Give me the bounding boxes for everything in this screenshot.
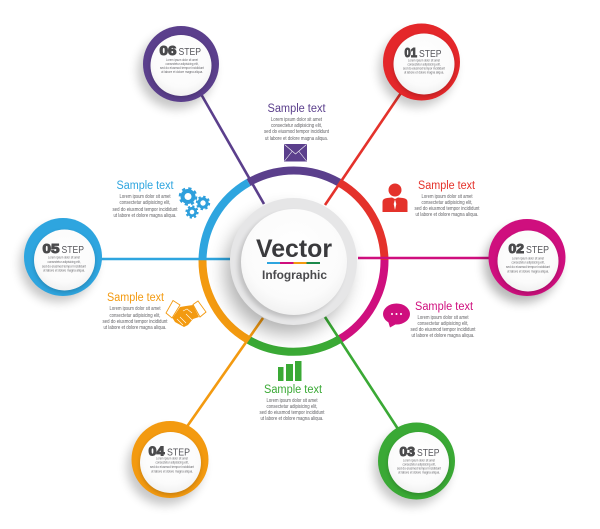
step 05: STEP <box>62 245 84 256</box>
step 01: Lorem ipsum dolor sit amet <box>408 58 441 62</box>
step 03: 03 <box>400 445 415 459</box>
central title: Vector <box>256 235 332 263</box>
text block: orange: Sample text <box>107 292 165 304</box>
step 01: 01 <box>404 46 417 60</box>
text block: orange: consectetur adipisicing elit, <box>110 313 160 319</box>
step 04: Lorem ipsum dolor sit amet <box>156 456 189 460</box>
step 01: consectetur adipisicing elit, <box>408 62 440 66</box>
text block: purple top: Sample text <box>268 103 326 115</box>
text block: orange: Lorem ipsum dolor sit amet <box>110 306 161 312</box>
step 01: ut labore et dolore magna aliqua. <box>404 70 444 74</box>
text block: blue: Sample text <box>116 180 174 192</box>
text block: blue: ut labore et dolore magna aliqua. <box>114 213 176 219</box>
step 01 <box>379 24 460 107</box>
text block: magenta: ut labore et dolore magna aliqua. <box>412 333 474 339</box>
step 04: ut labore et dolore magna aliqua. <box>151 468 193 474</box>
step 03: sed do eiusmod tempor incididunt <box>397 466 442 470</box>
text block: purple top: ut labore et dolore magna aliqua. <box>265 136 328 142</box>
step 06: Lorem ipsum dolor sit amet <box>166 57 199 62</box>
step 03: ut labore et dolore magna aliqua. <box>398 470 440 474</box>
text block: green <box>260 384 325 422</box>
icon: person <box>382 184 408 212</box>
step 02: consectetur adipisicing elit, <box>512 260 544 264</box>
step 06: ut labore et dolore magna aliqua. <box>161 69 203 74</box>
text block: purple top: consectetur adipisicing elit, <box>271 123 322 129</box>
text block: orange <box>102 292 168 331</box>
text block: magenta: consectetur adipisicing elit, <box>418 321 468 327</box>
text block: purple top: sed do eiusmod tempor incididunt <box>264 129 329 135</box>
text block: green: sed do eiusmod tempor incididunt <box>260 410 325 416</box>
step 05: consectetur adipisicing elit, <box>48 259 80 264</box>
text block: green: Sample text <box>264 384 323 396</box>
step 06: sed do eiusmod tempor incididunt <box>160 65 205 70</box>
text block: red: ut labore et dolore magna aliqua. <box>416 212 478 218</box>
central ring <box>202 170 385 352</box>
text block: red: Lorem ipsum dolor sit amet <box>422 194 473 200</box>
step 01: STEP <box>419 49 442 60</box>
text block: magenta: Sample text <box>415 301 474 313</box>
step 04: STEP <box>167 448 190 458</box>
text block: magenta <box>410 301 476 339</box>
step 05: sed do eiusmod tempor incididunt <box>42 264 87 268</box>
text block: blue: consectetur adipisicing elit, <box>120 200 170 206</box>
text block: red <box>414 180 480 218</box>
step 06: consectetur adipisicing elit, <box>166 61 198 66</box>
text block: magenta: Lorem ipsum dolor sit amet <box>418 315 469 321</box>
step 02 <box>484 219 566 303</box>
icon: bar chart <box>278 361 302 381</box>
step 04: sed do eiusmod tempor incididunt <box>150 464 195 469</box>
icon: envelope <box>284 144 307 162</box>
text block: blue: sed do eiusmod tempor incididunt <box>112 207 178 213</box>
step 04: consectetur adipisicing elit, <box>156 460 188 464</box>
text block: blue: Lorem ipsum dolor sit amet <box>120 194 171 200</box>
central subtitle: Infographic <box>262 268 327 282</box>
step 02: sed do eiusmod tempor incididunt <box>506 264 551 269</box>
text block: orange: ut labore et dolore magna aliqua. <box>104 325 166 331</box>
icon: handshake <box>166 300 206 327</box>
text block: purple top: Lorem ipsum dolor sit amet <box>271 117 322 123</box>
step 04 <box>127 421 208 505</box>
colour bar <box>267 262 320 264</box>
text block: orange: sed do eiusmod tempor incididunt <box>102 319 168 325</box>
step 06: STEP <box>178 47 201 58</box>
step 03: Lorem ipsum dolor sit amet <box>403 458 436 462</box>
step 05: 05 <box>42 242 60 256</box>
icon: gears <box>180 188 209 218</box>
text block: purple top <box>264 103 329 142</box>
icon: speech bubble <box>383 304 410 328</box>
text block: green: ut labore et dolore magna aliqua. <box>260 416 324 422</box>
step 05: ut labore et dolore magna aliqua. <box>43 268 85 272</box>
step 03: consectetur adipisicing elit, <box>402 462 436 466</box>
step 01: sed do eiusmod tempor incididunt <box>403 66 446 70</box>
step 02: Lorem ipsum dolor sit amet <box>512 256 545 260</box>
text block: green: Lorem ipsum dolor sit amet <box>266 398 318 404</box>
text block: red: sed do eiusmod tempor incididunt <box>414 206 480 212</box>
step 06 <box>138 26 219 109</box>
step 02: STEP <box>526 245 549 256</box>
central disc <box>225 198 357 334</box>
text block: red: consectetur adipisicing elit, <box>422 200 472 206</box>
text block: blue <box>112 180 178 219</box>
step 03: STEP <box>417 448 440 459</box>
text block: magenta: sed do eiusmod tempor incididunt <box>410 327 476 333</box>
step 02: 02 <box>508 242 524 256</box>
step 06: 06 <box>160 44 177 58</box>
step 04: 04 <box>148 444 165 458</box>
connector lines <box>98 90 490 429</box>
step 03 <box>374 422 455 506</box>
text block: red: Sample text <box>418 180 476 192</box>
step 05 <box>20 218 102 302</box>
text block: green: consectetur adipisicing elit, <box>266 404 318 410</box>
step 05: Lorem ipsum dolor sit amet <box>48 254 81 260</box>
step 02: ut labore et dolore magna aliqua. <box>507 268 549 274</box>
